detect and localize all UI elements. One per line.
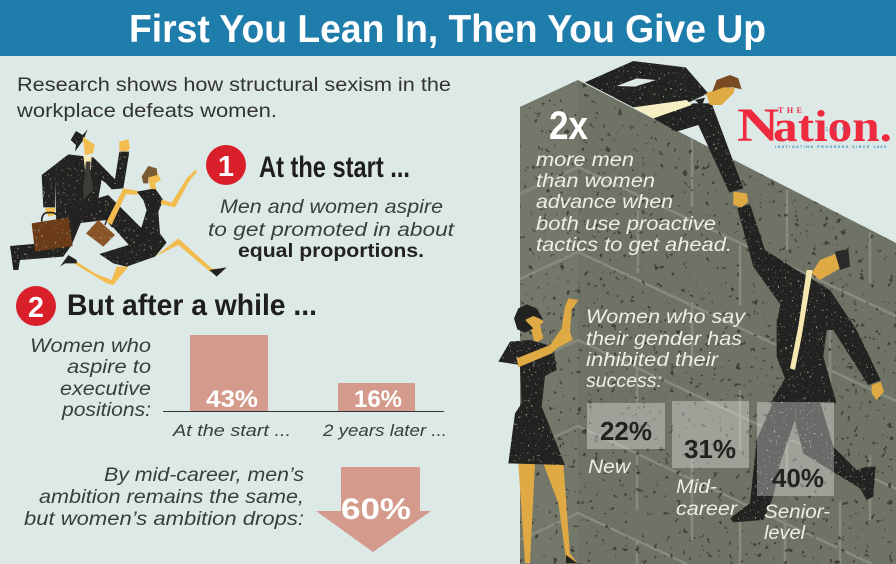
text: women who say gender inhibited success: success: (586, 371, 662, 392)
bar: mid-career 31%: Mid- (676, 477, 717, 498)
bar: senior-level 40%: level (764, 523, 806, 544)
text: women who say gender inhibited success: their gender has (586, 329, 743, 350)
bar: new 22%: New (588, 457, 631, 478)
bar chart: executive aspiration: 16% (354, 386, 402, 413)
title banner: First You Lean In, Then You Give Up (129, 8, 766, 51)
bar: senior-level 40% (757, 402, 834, 544)
text: mid-career ambition (24, 465, 305, 530)
text: women who aspire: aspire to (67, 357, 151, 378)
heading: at the start: At the start ... (259, 151, 410, 184)
step 2 badge (16, 286, 56, 326)
text: 2x statistic: than women (536, 171, 655, 192)
text: 2x statistic (536, 104, 732, 256)
intro text: workplace defeats women. (16, 101, 277, 122)
step 2 badge: 2 (28, 292, 44, 324)
bar chart: executive aspiration: 43% (206, 386, 258, 413)
heading: but after a while: But after a while ... (67, 289, 317, 322)
bar: mid-career 31%: career (676, 499, 738, 520)
step 1 badge (206, 145, 246, 185)
bar: mid-career 31% (672, 401, 749, 520)
text: women who aspire: executive (60, 379, 151, 400)
illustration: running man and woman (10, 129, 227, 285)
logo: The Nation: THE (778, 106, 802, 115)
logo: The Nation: INSTIGATING PROGRESS SINCE 1865 (775, 145, 886, 149)
text: 2x statistic: 2x (549, 104, 588, 148)
text: equal aspirations: to get promoted in about (208, 220, 455, 241)
bar chart: executive aspiration (163, 335, 447, 440)
intro text (16, 75, 451, 122)
text: 2x statistic: both use proactive (536, 214, 716, 235)
logo: The Nation: 150 (826, 127, 845, 133)
text: equal aspirations (208, 197, 455, 262)
illustration: woman at wall (498, 298, 578, 563)
text: women who say gender inhibited success: Women who say (586, 307, 747, 328)
bar: mid-career 31%: 31% (684, 434, 736, 464)
brick wall (520, 80, 896, 564)
text: women who say gender inhibited success (586, 307, 747, 392)
text: women who aspire: positions: (61, 400, 151, 421)
bar: new 22%: 22% (600, 416, 652, 446)
text: equal aspirations: equal proportions. (238, 241, 424, 262)
bar: senior-level 40%: 40% (772, 463, 824, 493)
text: 2x statistic: tactics to get ahead. (536, 235, 732, 256)
illustration: man on top of wall reaching down (585, 61, 850, 313)
bar: new 22% (587, 403, 665, 478)
arrow: 60% drop: 60% (341, 493, 411, 526)
text: women who aspire: Women who (30, 336, 151, 357)
text: 2x statistic: more men (536, 150, 634, 171)
logo: The Nation: ation. (773, 102, 892, 151)
text: mid-career ambition: but women’s ambition drops: (24, 509, 304, 530)
intro text: Research shows how structural sexism in the (17, 75, 451, 96)
step 1 badge: 1 (218, 151, 234, 183)
illustration: lower man climbing (730, 270, 884, 522)
text: mid-career ambition: ambition remains the same, (39, 487, 304, 508)
text: women who say gender inhibited success: inhibited their (586, 350, 719, 371)
text: equal aspirations: Men and women aspire (220, 197, 443, 218)
title banner (0, 0, 896, 56)
bar chart: executive aspiration: At the start ... (172, 421, 291, 440)
text: 2x statistic: advance when (536, 192, 673, 213)
logo: The Nation (737, 99, 892, 152)
arrow: 60% drop (316, 467, 431, 552)
text: women who aspire (30, 336, 151, 421)
bar chart: executive aspiration: 2 years later ... (322, 421, 447, 440)
logo: The Nation: N (737, 99, 779, 152)
text: mid-career ambition: By mid-career, men’s (104, 465, 305, 486)
bar: senior-level 40%: Senior- (764, 502, 830, 523)
